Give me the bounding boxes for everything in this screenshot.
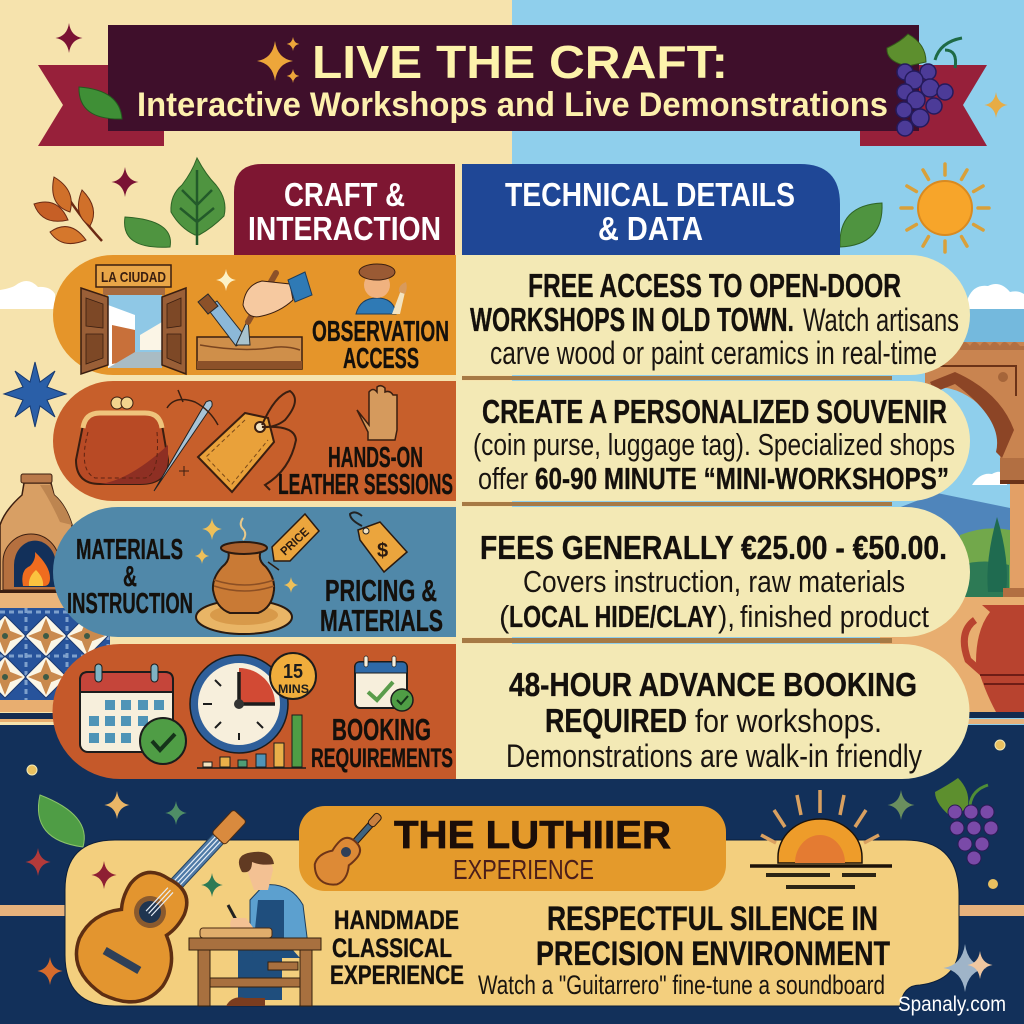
title: LIVE THE CRAFT: xyxy=(312,36,728,88)
label: handmade classical experience: EXPERIENCE xyxy=(330,960,464,990)
illustration: luthier at workbench xyxy=(189,852,321,1006)
row 1 right panel xyxy=(462,255,970,375)
row 1 right panel: FREE ACCESS TO OPEN-DOOR xyxy=(528,267,901,304)
label: observation access: OBSERVATION xyxy=(312,316,449,348)
row 4 right panel xyxy=(462,644,970,779)
row 3 left panel: pricing and materials xyxy=(53,507,456,638)
divider strip xyxy=(462,638,892,643)
icon: bottom grapes xyxy=(935,778,998,865)
ribbon: left tail xyxy=(38,65,164,146)
divider strip xyxy=(462,376,892,380)
header: technical details and data: & DATA xyxy=(598,210,703,247)
icon: autumn branch xyxy=(34,177,102,244)
dots and sparkles xyxy=(25,740,1005,985)
row 1 left panel: observation access xyxy=(53,255,456,375)
header: craft and interaction: CRAFT & xyxy=(284,176,405,213)
icon: open door la ciudad xyxy=(81,265,186,374)
scene: azulejo tiles xyxy=(0,608,110,722)
decoration: blue star xyxy=(4,362,66,427)
row 4 right panel: for workshops. xyxy=(695,703,882,739)
row 3 right panel: LOCAL HIDE/CLAY xyxy=(509,599,717,634)
row 3 right panel xyxy=(462,507,970,637)
divider strip xyxy=(462,502,892,506)
decoration: top-left sparkle xyxy=(56,23,82,53)
row 3 right panel: ), xyxy=(718,599,735,634)
label: hands-on leather sessions xyxy=(278,442,453,501)
icons: panel sparkles xyxy=(91,861,223,897)
scene: arch and hills xyxy=(880,342,1024,598)
icon: bar chart xyxy=(197,715,306,768)
icon: banner grapes xyxy=(887,34,962,136)
header: craft and interaction: INTERACTION xyxy=(248,210,441,247)
row 4 left panel: booking requirements xyxy=(52,644,456,779)
label: observation access: ACCESS xyxy=(343,343,419,375)
icon: calendar with check xyxy=(80,664,186,764)
icon: large green leaf xyxy=(171,158,225,245)
icon: artisan with beret xyxy=(356,264,407,314)
scene: right cloud xyxy=(966,284,1024,309)
icon: dollar tag: $ xyxy=(377,540,388,562)
text: respectful silence: Watch a "Guitarrero" fine-tune a soundboard xyxy=(478,970,885,1000)
title banner xyxy=(38,25,987,146)
label: pricing and materials: MATERIALS xyxy=(320,603,443,638)
decoration: right gold sparkle xyxy=(984,92,1008,118)
label: materials and instruction: INSTRUCTION xyxy=(67,588,193,620)
icon: clock xyxy=(190,655,288,753)
icon: small guitar xyxy=(308,804,392,891)
icon: clay pot on wheel xyxy=(196,518,292,634)
icon: needle and thread xyxy=(154,390,218,491)
header: craft and interaction xyxy=(234,164,455,255)
text: respectful silence: PRECISION ENVIRONMENT xyxy=(536,935,890,973)
icon: small calendar xyxy=(355,656,413,711)
icon: banner leaf xyxy=(79,87,122,119)
icon: sunset xyxy=(750,790,892,887)
label: pricing and materials: PRICING & xyxy=(325,573,437,608)
ribbon: right tail xyxy=(860,65,987,146)
icon: sun xyxy=(901,164,989,252)
label: materials and instruction: MATERIALS xyxy=(76,534,183,566)
row 4 right panel: Demonstrations are walk-in friendly xyxy=(506,738,922,774)
label: handmade classical experience xyxy=(330,905,464,990)
bottom band stripe xyxy=(0,905,1024,916)
row 1 right panel: WORKSHOPS IN OLD TOWN. xyxy=(470,301,794,338)
icon: leaf by header xyxy=(840,203,882,247)
icon: price tag: PRICE xyxy=(277,525,312,558)
scene: terracotta vase on right xyxy=(880,597,1024,724)
strip behind right column xyxy=(456,255,462,779)
label: hands-on leather sessions: HANDS-ON xyxy=(328,442,423,474)
row 3 right panel: FEES GENERALLY €25.00 - €50.00. xyxy=(480,529,947,566)
row 4 right panel: REQUIRED xyxy=(545,702,687,739)
panel: luthier experience xyxy=(61,790,959,1018)
scene: left cloud xyxy=(0,281,55,309)
icon: glove xyxy=(357,386,397,440)
icon: coin purse xyxy=(76,397,168,484)
banner panel xyxy=(108,25,919,131)
label: materials and instruction xyxy=(67,534,193,620)
text: respectful silence xyxy=(478,900,890,1000)
icon: 15 mins badge: 15 xyxy=(283,661,303,683)
header: technical details and data: TECHNICAL DETAILS xyxy=(505,176,795,213)
row 2 right panel: offer xyxy=(478,461,528,496)
decoration: red sparkle xyxy=(112,167,138,197)
row 2 left panel: leather sessions xyxy=(53,381,456,501)
label: observation access xyxy=(312,316,449,375)
text: respectful silence: RESPECTFUL SILENCE IN xyxy=(547,900,878,938)
icon: leather tag with thread xyxy=(198,391,296,492)
icon: open door la ciudad: LA CIUDAD xyxy=(101,269,166,286)
label: booking requirements: REQUIREMENTS xyxy=(311,743,453,773)
title sparkle icon xyxy=(257,37,299,83)
watermark: Spanaly.com xyxy=(898,993,1006,1016)
scene: brick oven xyxy=(0,474,72,608)
icon: 15 mins badge: MINS xyxy=(278,682,309,696)
row 1 right panel: Watch artisans xyxy=(803,302,959,338)
label: handmade classical experience: HANDMADE xyxy=(334,905,459,935)
icon: dollar tag xyxy=(350,512,407,572)
experience text: EXPERIENCE xyxy=(453,854,594,885)
subtitle: Interactive Workshops and Live Demonstrations xyxy=(137,86,888,124)
row 3 right panel: ( xyxy=(499,599,510,634)
label: handmade classical experience: CLASSICAL xyxy=(332,933,452,963)
row 4 right panel: 48-HOUR ADVANCE BOOKING xyxy=(509,666,917,703)
header: technical details and data xyxy=(462,164,840,255)
icons: gold sparkles xyxy=(195,518,298,593)
icon: sparkle xyxy=(216,269,236,291)
label: hands-on leather sessions: LEATHER SESSIONS xyxy=(278,469,453,501)
row 3 right panel: Covers instruction, raw materials xyxy=(523,564,905,599)
decoration: silver sparkle xyxy=(943,944,993,992)
header: the luthier experience xyxy=(299,804,726,891)
icon: hand carving wood xyxy=(197,272,312,369)
icon: small green leaf xyxy=(125,217,170,247)
label: booking requirements xyxy=(311,712,453,773)
row 2 right panel xyxy=(462,381,970,501)
label: materials and instruction: & xyxy=(123,561,137,593)
icon: classical guitar xyxy=(61,809,247,1018)
row 3 right panel: finished product xyxy=(740,599,929,634)
the luthier text: THE LUTHIIER xyxy=(394,814,671,857)
icon: price tag xyxy=(268,514,319,570)
label: booking requirements: BOOKING xyxy=(332,712,431,747)
label: pricing and materials xyxy=(320,573,443,638)
icon: navy leaf xyxy=(38,795,84,847)
icon: 15 mins badge xyxy=(270,653,316,699)
